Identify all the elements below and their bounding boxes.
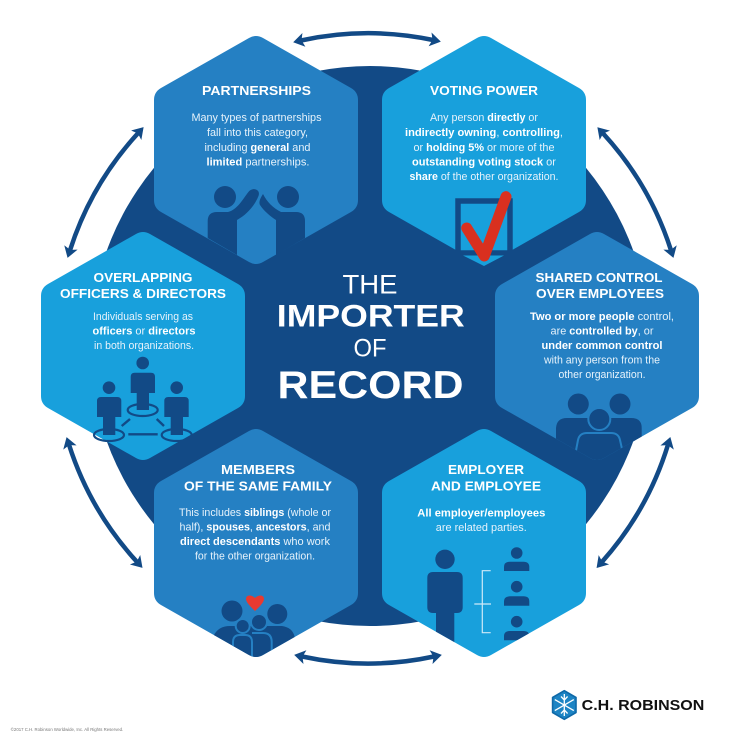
body text: half), spouses, ancestors, and bbox=[180, 522, 330, 534]
heading: OVER EMPLOYEES bbox=[536, 286, 664, 301]
heading: OF THE SAME FAMILY bbox=[184, 478, 332, 494]
icon: family with heart bbox=[214, 596, 294, 657]
arrow: top bbox=[301, 33, 433, 40]
hexagon background bbox=[495, 232, 699, 460]
central dark circle bbox=[90, 66, 650, 626]
center title bbox=[277, 270, 465, 407]
hexagon background bbox=[382, 36, 586, 264]
body text: are controlled by, or bbox=[550, 326, 654, 338]
body text bbox=[530, 311, 674, 381]
body text: for the other organization. bbox=[195, 550, 315, 562]
body text: or holding 5% or more of the bbox=[414, 142, 554, 154]
body text: in both organizations. bbox=[94, 340, 194, 352]
center title: IMPORTER bbox=[277, 298, 465, 334]
panel: employer and employee bbox=[382, 429, 586, 660]
arrow: upper right bbox=[603, 133, 671, 250]
hexagon background bbox=[382, 429, 586, 657]
panel: overlapping officers and directors bbox=[41, 232, 245, 460]
body text: outstanding voting stock or bbox=[412, 156, 556, 168]
icon: two people high five bbox=[208, 186, 305, 255]
body text: Individuals serving as bbox=[93, 311, 194, 323]
body text bbox=[179, 507, 331, 562]
body text: Two or more people control, bbox=[530, 311, 674, 323]
center title: THE bbox=[342, 270, 398, 300]
heading: PARTNERSHIPS bbox=[202, 83, 311, 98]
body text: including general and bbox=[204, 142, 310, 154]
arrow: bottom bbox=[302, 656, 434, 663]
arrow: lower left bbox=[69, 445, 137, 562]
body text: limited partnerships. bbox=[206, 156, 310, 168]
icon: three people group bbox=[556, 394, 642, 460]
body text: other organization. bbox=[558, 369, 646, 381]
arrow: upper left bbox=[70, 133, 138, 250]
logo: C.H. Robinson bbox=[553, 691, 704, 719]
body text: direct descendants who work bbox=[180, 536, 331, 548]
body text bbox=[92, 311, 196, 352]
body text: All employer/employees bbox=[417, 508, 545, 520]
hexagon background bbox=[41, 232, 245, 460]
body text: fall into this category, bbox=[207, 127, 308, 139]
body text: share of the other organization. bbox=[410, 171, 558, 183]
body text: with any person from the bbox=[543, 354, 660, 366]
center title: OF bbox=[354, 335, 386, 363]
body text bbox=[192, 112, 322, 168]
wordmark: C.H. ROBINSON bbox=[582, 698, 704, 714]
body text bbox=[405, 112, 563, 183]
heading: EMPLOYER bbox=[448, 462, 525, 477]
body text bbox=[417, 508, 545, 534]
heading: MEMBERS bbox=[221, 462, 295, 477]
heading: AND EMPLOYEE bbox=[431, 478, 541, 494]
copyright note: ©2017 C.H. Robinson Worldwide, Inc. All Rights Reserved. bbox=[11, 726, 123, 732]
body text: are related parties. bbox=[436, 522, 527, 534]
panel: members of the same family bbox=[154, 429, 358, 662]
heading: SHARED CONTROL bbox=[536, 270, 663, 285]
heading: VOTING POWER bbox=[430, 83, 539, 98]
heading bbox=[60, 270, 226, 301]
heading: OFFICERS & DIRECTORS bbox=[60, 286, 226, 301]
hexagon background bbox=[154, 429, 358, 657]
arrow: lower right bbox=[602, 445, 668, 562]
body text: officers or directors bbox=[92, 326, 196, 338]
body text: indirectly owning, controlling, bbox=[405, 127, 563, 139]
icon: snowflake hexagon bbox=[553, 691, 576, 719]
hexagon background bbox=[154, 36, 358, 264]
body text: Any person directly or bbox=[430, 112, 538, 124]
panel: voting power bbox=[382, 36, 586, 266]
center title: RECORD bbox=[278, 364, 464, 407]
panel: shared control over employees bbox=[495, 232, 699, 470]
heading: OVERLAPPING bbox=[94, 270, 192, 285]
body text: This includes siblings (whole or bbox=[179, 507, 331, 519]
heading bbox=[431, 462, 541, 494]
icon: three connected people bbox=[94, 357, 192, 441]
heading bbox=[184, 462, 332, 494]
icon: employer with employees bbox=[427, 547, 530, 642]
icon: ballot box with red check bbox=[458, 197, 510, 266]
heading bbox=[536, 270, 664, 301]
body text: under common control bbox=[542, 340, 662, 352]
panel: partnerships bbox=[154, 36, 358, 264]
body text: Many types of partnerships bbox=[192, 112, 322, 124]
